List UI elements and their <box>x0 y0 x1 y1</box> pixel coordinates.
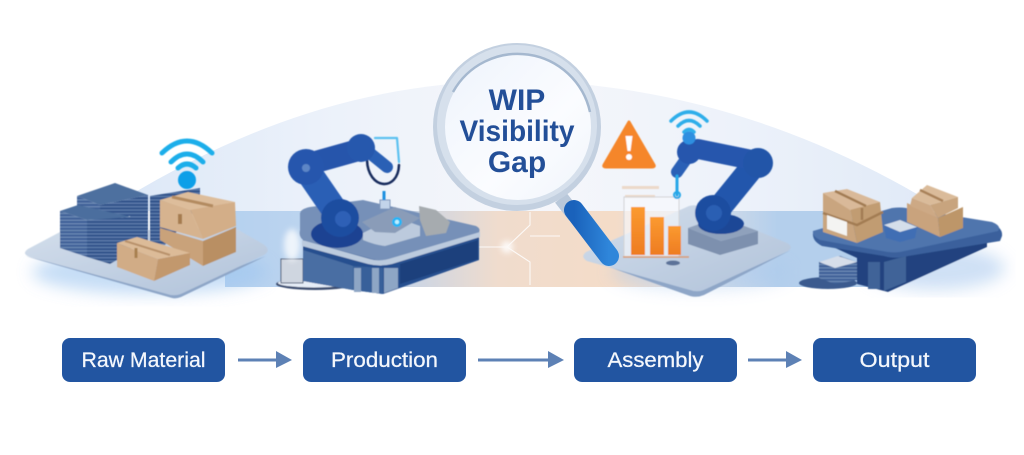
cardboard boxes left <box>823 189 883 243</box>
step: assembly <box>574 338 737 382</box>
arrow <box>748 351 802 368</box>
station: output <box>799 185 1005 292</box>
step: production <box>303 338 466 382</box>
arrow <box>478 351 564 368</box>
icon: wifi <box>671 112 707 144</box>
step: output: Output <box>860 349 930 372</box>
machine base <box>300 200 480 294</box>
conveyor body <box>813 208 1002 292</box>
robot arm <box>674 140 773 234</box>
arrow <box>238 351 292 368</box>
bar chart <box>622 186 689 266</box>
step: raw material <box>62 338 225 382</box>
network lines in floor <box>470 212 560 285</box>
background dome <box>104 81 945 287</box>
title: WIP <box>489 84 545 117</box>
step: raw material: Raw Material <box>82 349 206 372</box>
station: assembly <box>583 112 791 297</box>
icon: wifi <box>162 141 212 189</box>
small canister <box>276 229 354 290</box>
platform <box>25 228 268 298</box>
platform <box>583 205 791 297</box>
station: raw material <box>25 141 268 298</box>
magnifying glass <box>433 43 609 256</box>
scanner device <box>884 220 917 242</box>
paper output tray <box>799 256 857 289</box>
step: assembly: Assembly <box>608 349 704 372</box>
coloured floor band <box>225 211 875 287</box>
robot arm <box>288 134 399 248</box>
step: output <box>813 338 976 382</box>
machine bed <box>362 191 450 246</box>
cardboard boxes right <box>907 185 963 237</box>
title: Visibility <box>460 115 575 148</box>
title: Gap <box>488 146 546 179</box>
handle <box>561 198 609 256</box>
title <box>460 84 575 179</box>
callout: warning triangle <box>604 122 654 167</box>
cardboard boxes <box>117 192 236 281</box>
robot pedestal <box>688 217 758 255</box>
paper stacks <box>60 183 200 264</box>
lens <box>433 43 601 211</box>
process flow <box>62 338 976 382</box>
step: production: Production <box>331 349 438 372</box>
station: production <box>276 134 480 294</box>
